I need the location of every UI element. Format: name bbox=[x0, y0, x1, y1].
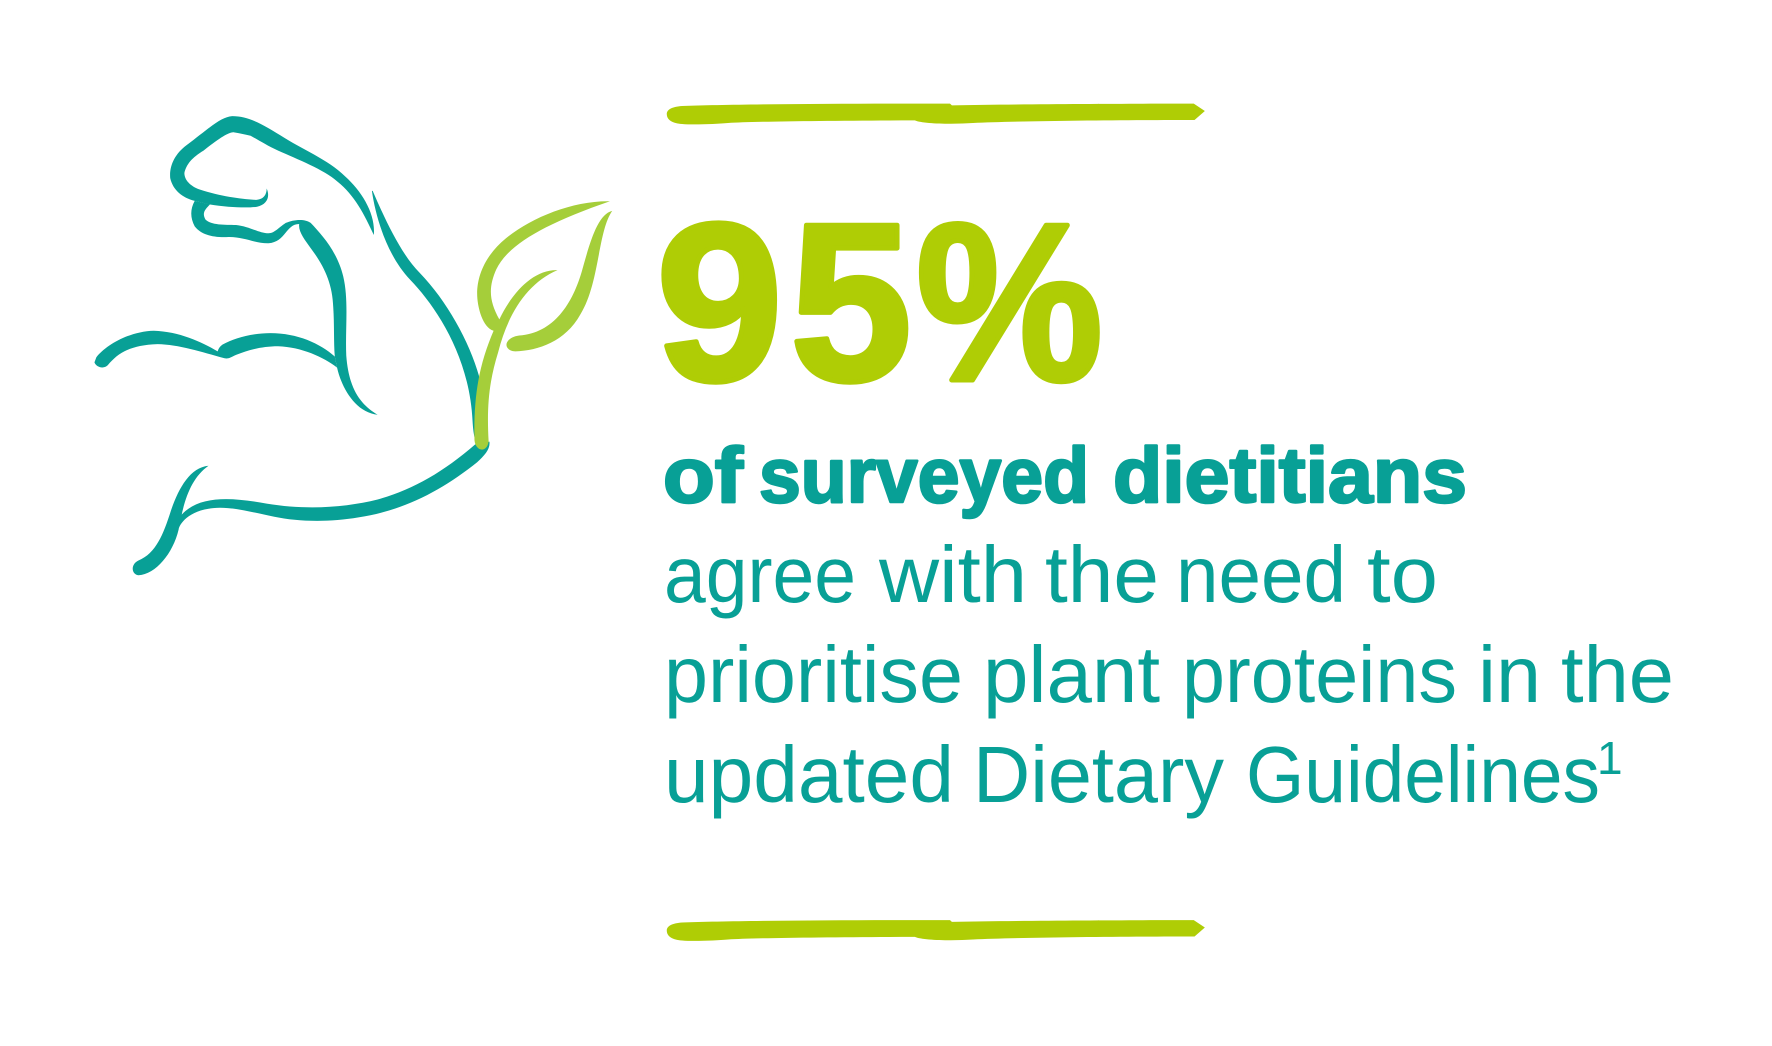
body text: the bbox=[1561, 630, 1674, 719]
big statistic bbox=[656, 176, 1103, 428]
arm outline bbox=[94, 116, 490, 575]
body text: prioritise bbox=[664, 630, 963, 719]
body text: updated bbox=[664, 730, 954, 819]
bold subheading: dietitians bbox=[1113, 431, 1467, 519]
top brush divider bbox=[667, 104, 1205, 124]
bold subheading bbox=[663, 431, 1467, 519]
bold subheading: surveyed bbox=[759, 431, 1089, 519]
body text: to bbox=[1367, 530, 1438, 619]
body text: with bbox=[878, 530, 1027, 619]
body text: Dietary bbox=[973, 730, 1224, 819]
big statistic: % bbox=[916, 176, 1103, 428]
body text: proteins bbox=[1182, 630, 1457, 719]
bottom brush divider bbox=[667, 920, 1205, 941]
icon: flexed arm with sprouting leaf bbox=[94, 116, 612, 575]
bold subheading: of bbox=[663, 431, 744, 519]
body text: Guidelines bbox=[1246, 730, 1600, 819]
body text: agree bbox=[664, 530, 856, 619]
body text: in bbox=[1478, 630, 1541, 719]
body text: need bbox=[1176, 530, 1346, 619]
body text: plant bbox=[983, 630, 1160, 719]
body text bbox=[664, 530, 1674, 819]
big statistic: 5 bbox=[790, 176, 912, 428]
body text: 1 bbox=[1597, 732, 1623, 784]
body text: the bbox=[1045, 530, 1159, 619]
leaf sprout bbox=[474, 201, 612, 450]
big statistic: 9 bbox=[656, 176, 783, 428]
